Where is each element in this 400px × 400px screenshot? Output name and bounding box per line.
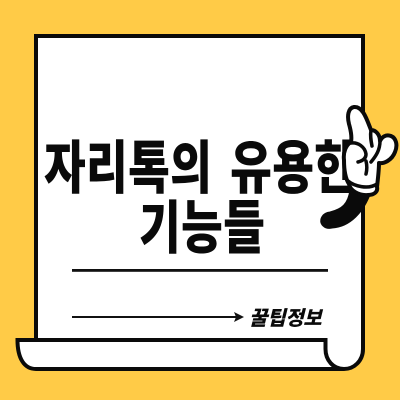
title <box>44 136 356 260</box>
divider line <box>72 269 328 272</box>
arrow <box>72 312 244 322</box>
icon: pointing hand <box>321 107 396 228</box>
icon: sleeve <box>321 190 371 228</box>
icon: finger and cuff lines <box>348 130 380 187</box>
title: 기능들 <box>139 196 265 260</box>
panel: paper scroll <box>18 36 363 369</box>
label: 꿀팁정보: 꿀팁정보 <box>249 308 323 330</box>
title: 자리톡의 유용한 <box>44 136 356 200</box>
